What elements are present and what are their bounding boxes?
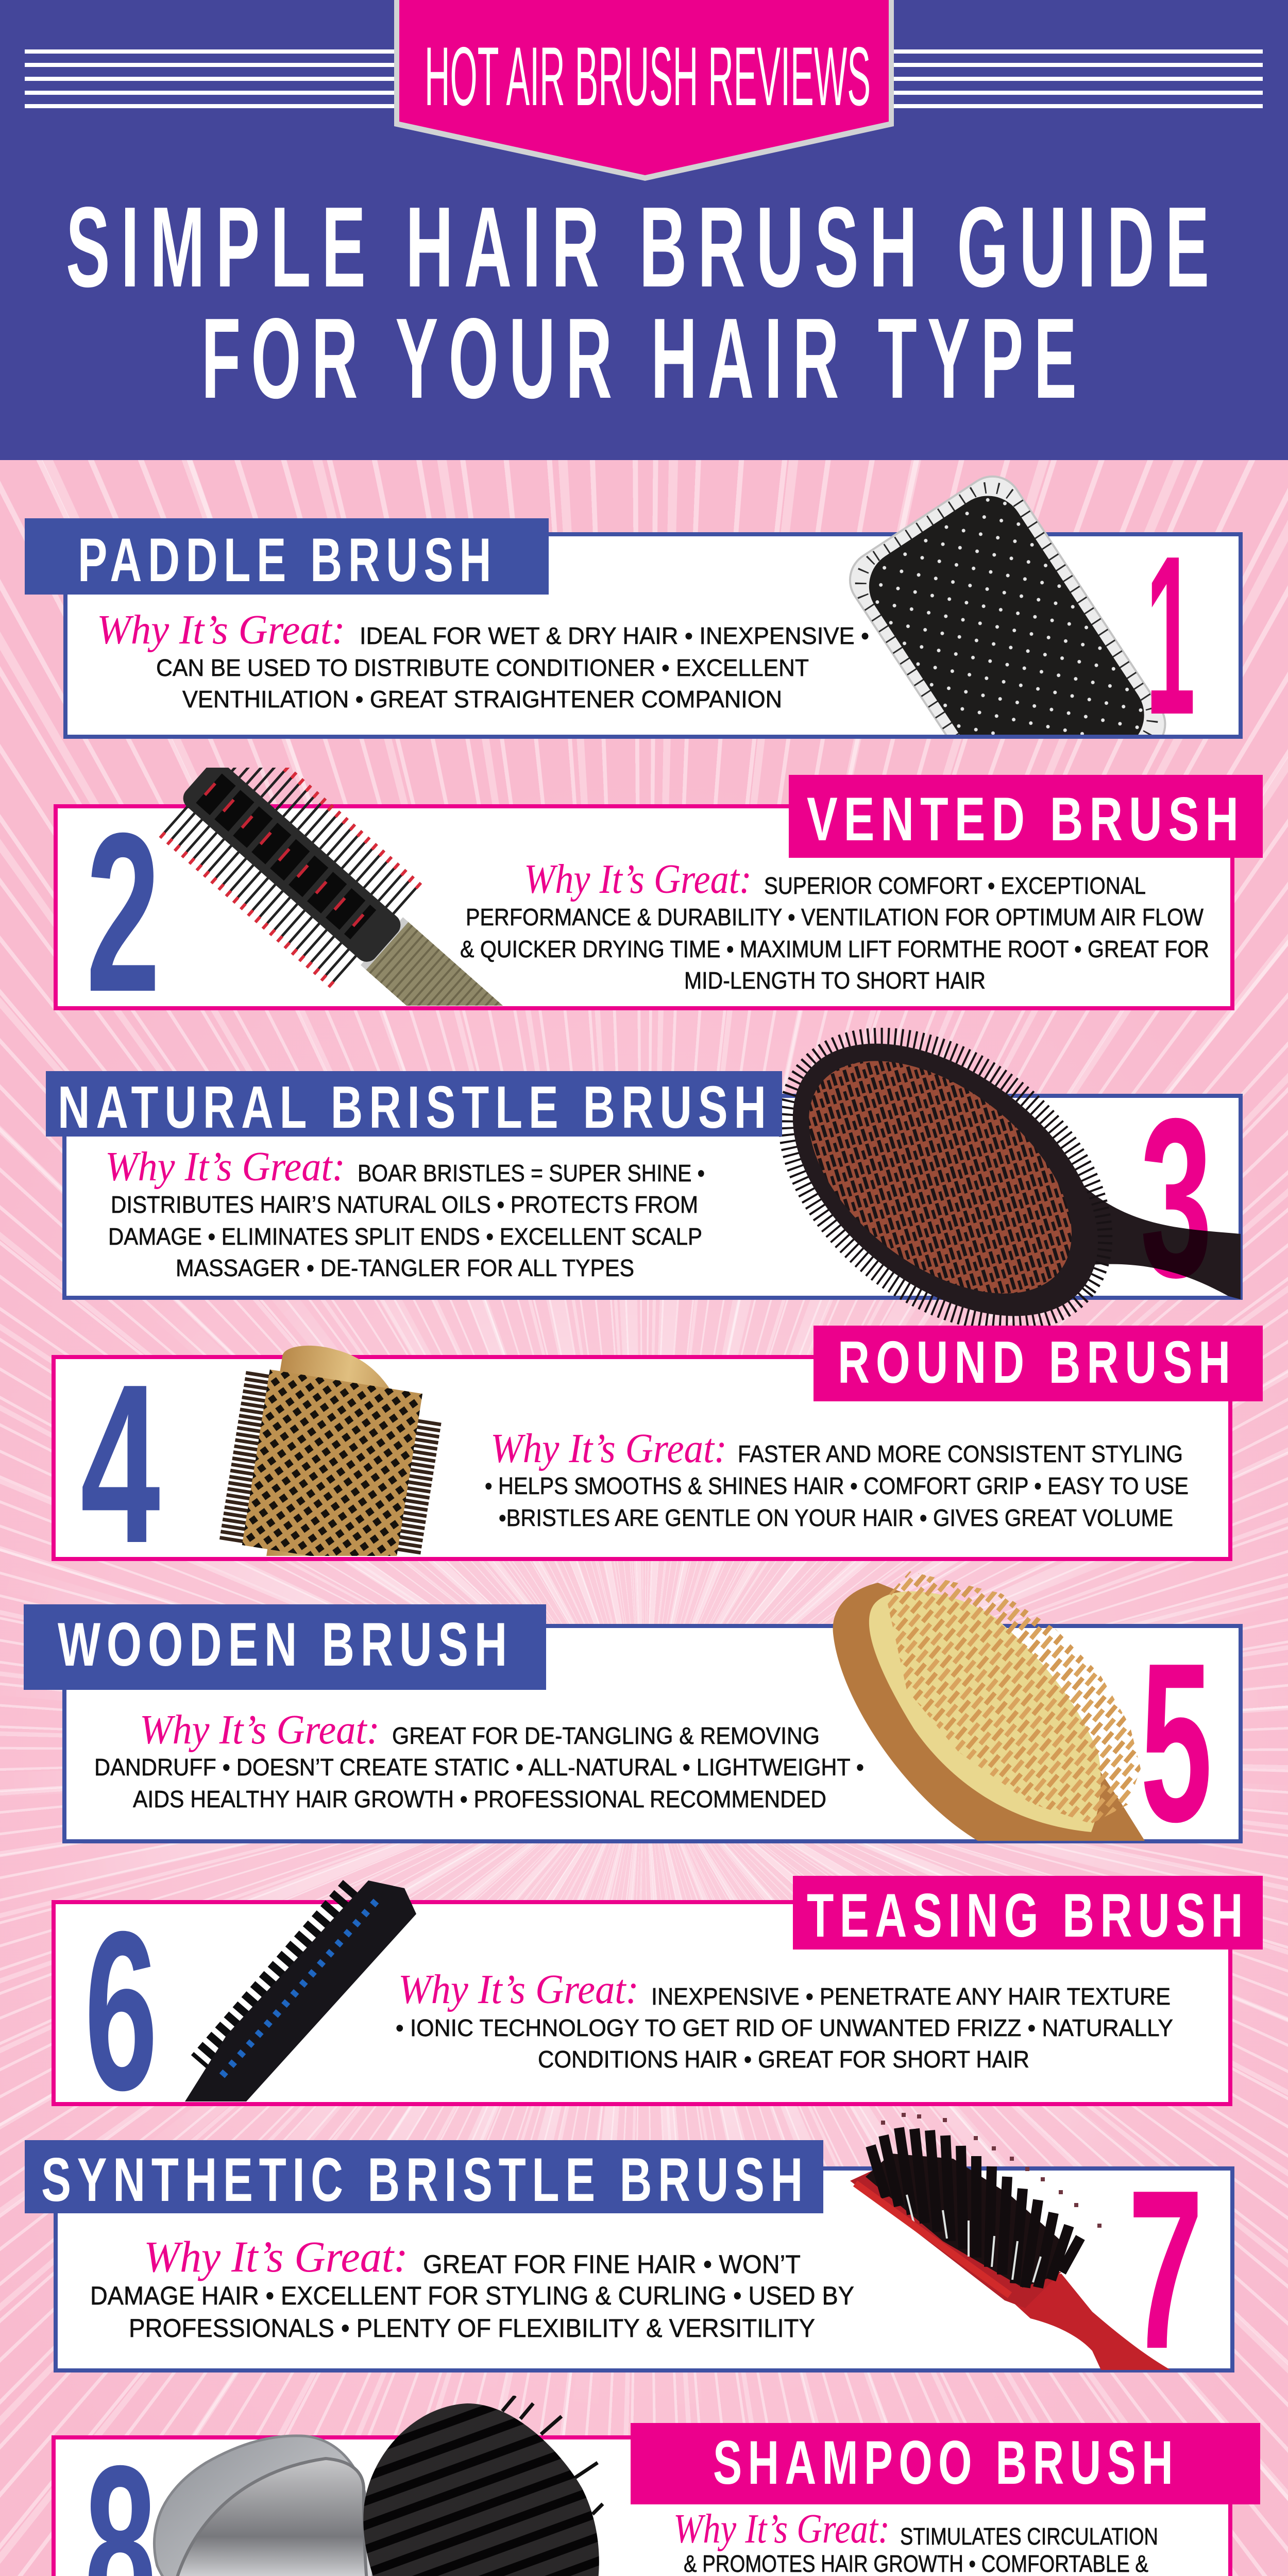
panel 4: round brush: [54, 1326, 1263, 1592]
text block: GREAT FOR DE-TANGLING & REMOVING: [392, 1722, 820, 1749]
heading: WOODEN BRUSH: [58, 1610, 513, 1679]
text block: [460, 857, 1209, 994]
text block: Why It’s Great:: [97, 607, 345, 653]
text block: FASTER AND MORE CONSISTENT STYLING: [738, 1440, 1183, 1467]
text block: Why It’s Great:: [673, 2506, 890, 2552]
text block: PERFORMANCE & DURABILITY • VENTILATION FOR OPTIMUM AIR FLOW: [466, 904, 1204, 930]
panel 1: paddle brush: [25, 465, 1241, 839]
text block: AIDS HEALTHY HAIR GROWTH • PROFESSIONAL RECOMMENDED: [133, 1786, 826, 1812]
heading: SYNTHETIC BRISTLE BRUSH: [41, 2145, 809, 2214]
heading: [24, 1604, 546, 1690]
text block: DANDRUFF • DOESN’T CREATE STATIC • ALL-NATURAL • LIGHTWEIGHT •: [94, 1754, 864, 1781]
number 6: 6: [84, 1885, 158, 2138]
text block: PROFESSIONALS • PLENTY OF FLEXIBILITY & VERSITILITY: [129, 2314, 815, 2343]
text block: BOAR BRISTLES = SUPER SHINE •: [358, 1160, 705, 1187]
text block: CAN BE USED TO DISTRIBUTE CONDITIONER • EXCELLENT: [156, 654, 809, 681]
panel 5: wooden brush: [24, 1571, 1241, 1869]
text block: [665, 2506, 1165, 2576]
number 4: 4: [80, 1337, 161, 1590]
text block: STIMULATES CIRCULATION: [900, 2523, 1158, 2550]
number 2: 2: [86, 786, 160, 1039]
heading: [25, 518, 549, 595]
icon: synthetic bristle brush: [850, 2115, 1171, 2370]
number 5: 5: [1140, 1616, 1212, 1869]
text block: DAMAGE HAIR • EXCELLENT FOR STYLING & CURLING • USED BY: [90, 2281, 854, 2310]
panel 8: shampoo brush: [54, 2396, 1260, 2576]
icon: paddle brush: [839, 465, 1176, 839]
text block: Why It’s Great:: [140, 1707, 380, 1753]
heading: NATURAL BRISTLE BRUSH: [58, 1074, 772, 1141]
panel 6: teasing brush: [54, 1876, 1263, 2138]
icon: teasing brush: [185, 1880, 416, 2102]
panel 7: synthetic bristle brush: [25, 2115, 1232, 2396]
text block: Why It’s Great:: [105, 1144, 345, 1190]
icon: wooden brush: [833, 1571, 1145, 1841]
text block: SUPERIOR COMFORT • EXCEPTIONAL: [764, 872, 1146, 899]
text block: CONDITIONS HAIR • GREAT FOR SHORT HAIR: [538, 2046, 1029, 2073]
icon: natural bristle brush: [735, 980, 1241, 1379]
panel 2: vented brush: [56, 728, 1263, 1083]
text block: DAMAGE • ELIMINATES SPLIT ENDS • EXCELLENT SCALP: [108, 1223, 702, 1250]
text block: [97, 607, 869, 713]
text block: [94, 1707, 864, 1812]
banner ribbon: [394, 0, 894, 181]
text block: [396, 1967, 1173, 2073]
text block: INEXPENSIVE • PENETRATE ANY HAIR TEXTURE: [651, 1983, 1171, 2010]
text block: [90, 2232, 854, 2343]
header stripes left: [25, 49, 394, 108]
header stripes right: [894, 49, 1263, 108]
header band: [0, 0, 1288, 460]
number 7: 7: [1128, 2143, 1204, 2396]
text block: MID-LENGTH TO SHORT HAIR: [684, 967, 986, 994]
panel 1: paddle brush: 1: [1146, 509, 1195, 762]
text block: • HELPS SMOOTHS & SHINES HAIR • COMFORT GRIP • EASY TO USE: [485, 1472, 1189, 1499]
text block: [105, 1144, 705, 1281]
text block: Why It’s Great:: [490, 1426, 727, 1471]
text block: • IONIC TECHNOLOGY TO GET RID OF UNWANTED FRIZZ • NATURALLY: [396, 2014, 1173, 2041]
icon: vented brush: [154, 728, 531, 1083]
text block: Why It’s Great:: [144, 2232, 408, 2281]
heading: PADDLE BRUSH: [78, 526, 497, 595]
text block: MASSAGER • DE-TANGLER FOR ALL TYPES: [176, 1255, 634, 1281]
text block: •BRISTLES ARE GENTLE ON YOUR HAIR • GIVES GREAT VOLUME: [499, 1504, 1173, 1531]
text block: DISTRIBUTES HAIR’S NATURAL OILS • PROTECTS FROM: [111, 1191, 698, 1218]
panel 3: natural bristle brush: [46, 980, 1241, 1379]
icon: shampoo brush: [154, 2396, 603, 2576]
text block: Why It’s Great:: [524, 857, 752, 902]
text block: [485, 1426, 1189, 1531]
heading: [25, 2140, 823, 2214]
text block: VENTHILATION • GREAT STRAIGHTENER COMPANION: [182, 686, 782, 713]
icon: round brush: [239, 1339, 427, 1592]
text block: GREAT FOR FINE HAIR • WON’T: [423, 2250, 801, 2279]
text block: IDEAL FOR WET & DRY HAIR • INEXPENSIVE •: [360, 622, 869, 649]
number 3: 3: [1140, 1072, 1212, 1325]
title: [66, 183, 1220, 422]
text block: Why It’s Great:: [398, 1967, 639, 2012]
text block: & QUICKER DRYING TIME • MAXIMUM LIFT FORMTHE ROOT • GREAT FOR: [460, 936, 1209, 962]
